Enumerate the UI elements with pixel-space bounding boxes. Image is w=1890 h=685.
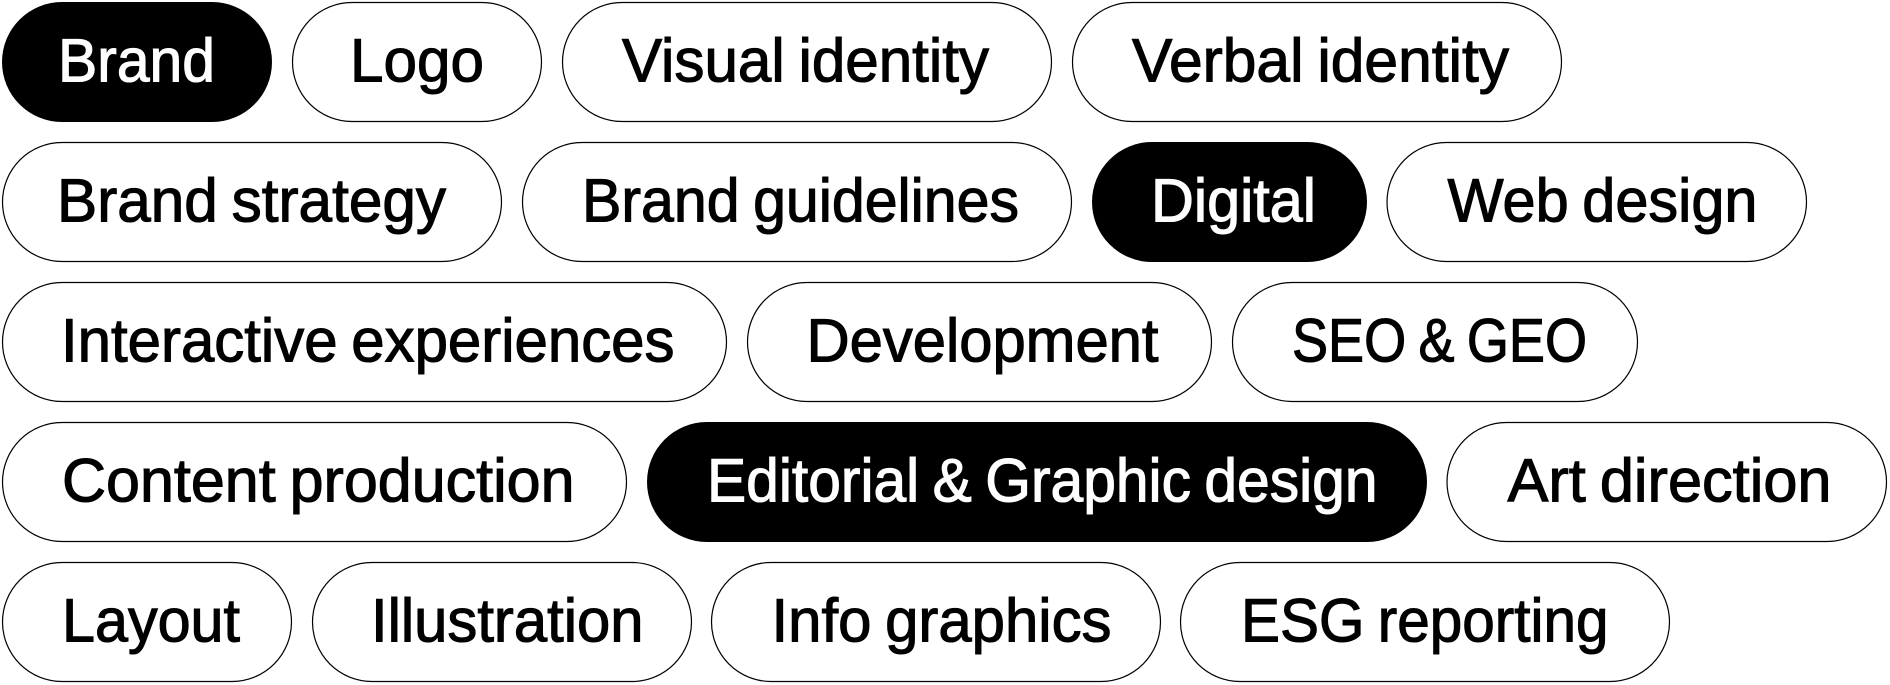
tag: Interactive experiences: Interactive experiences <box>61 306 674 374</box>
tag: Web design: Web design <box>1448 166 1758 234</box>
tag: SEO & GEO <box>1232 282 1638 402</box>
tag: ESG reporting: ESG reporting <box>1241 586 1608 654</box>
tag: Brand <box>2 2 272 122</box>
tag: Illustration: Illustration <box>371 586 644 654</box>
tag: Visual identity <box>562 2 1052 122</box>
tag: Visual identity: Visual identity <box>622 26 989 94</box>
tag: Digital <box>1092 142 1367 262</box>
tag: Brand guidelines <box>522 142 1072 262</box>
tag: Verbal identity: Verbal identity <box>1132 26 1509 94</box>
tag: Digital: Digital <box>1151 166 1316 234</box>
tag: Development <box>748 282 1212 402</box>
tag: Verbal identity <box>1072 2 1562 122</box>
tag: Logo <box>292 2 542 122</box>
tag: Brand strategy: Brand strategy <box>57 166 446 234</box>
tag: Brand guidelines: Brand guidelines <box>582 166 1019 234</box>
tag: SEO & GEO: SEO & GEO <box>1292 306 1587 374</box>
tag: Web design <box>1387 142 1806 262</box>
tag: Art direction <box>1447 422 1886 542</box>
tag: Editorial & Graphic design <box>647 422 1427 542</box>
tag: ESG reporting <box>1180 562 1670 682</box>
tag: Logo: Logo <box>350 26 484 94</box>
tag: Development: Development <box>806 306 1159 374</box>
tag: Editorial & Graphic design: Editorial & Graphic design <box>707 446 1378 514</box>
tag: Info graphics: Info graphics <box>772 586 1112 654</box>
tag: Content production <box>2 422 626 542</box>
tag: Brand strategy <box>2 142 502 262</box>
tag: Brand: Brand <box>58 26 215 94</box>
tag: Layout: Layout <box>62 586 240 654</box>
tag: Illustration <box>312 562 692 682</box>
tag: Layout <box>2 562 292 682</box>
tag: Info graphics <box>712 562 1160 682</box>
tag: Interactive experiences <box>2 282 726 402</box>
tag: Content production: Content production <box>62 446 574 514</box>
tag: Art direction: Art direction <box>1508 446 1832 514</box>
